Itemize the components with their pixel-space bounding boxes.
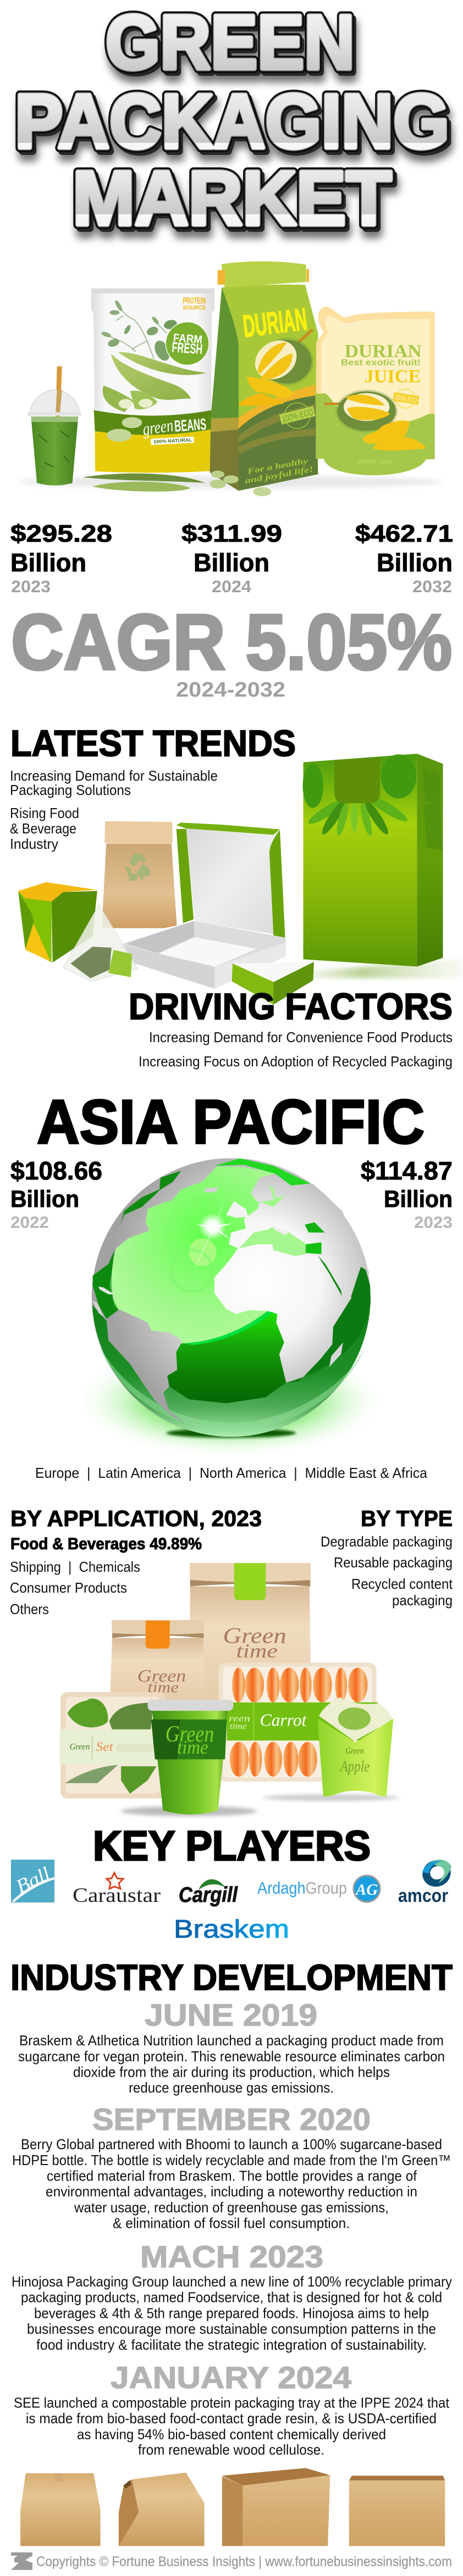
icon: green beans pouch: FRESH xyxy=(171,339,203,358)
icon: South America land xyxy=(107,1310,185,1423)
icon: green globe xyxy=(73,1158,387,1458)
development: June 2019: reduce greenhouse gas emissions. xyxy=(129,2079,334,2096)
icon: kraft recycle bag xyxy=(102,821,177,928)
logo: amcor xyxy=(398,1855,455,1906)
icon: yellow and green takeout box xyxy=(18,882,97,962)
icon: south atlantic deep ocean xyxy=(167,1311,286,1403)
stat: 2024 market size: $311.99 xyxy=(181,520,282,547)
text: application segments: Consumer Products xyxy=(10,1579,127,1596)
icon: Fortune Business Insights logo xyxy=(11,2552,32,2570)
text: type segments: packaging xyxy=(392,1592,453,1609)
title: GREEN xyxy=(106,0,355,85)
icon: small paper bag: time xyxy=(148,1679,179,1696)
title: GREEN xyxy=(108,2,357,88)
icon: apple box: Green xyxy=(345,1746,364,1756)
title: GREEN xyxy=(106,0,355,85)
title: MARKET xyxy=(73,155,392,241)
icon: green beans pouch: PROTEIN xyxy=(183,297,206,306)
development: March 2023 xyxy=(12,2239,452,2353)
development: September 2020 xyxy=(12,2102,451,2232)
icon: durian paper bag: For a healthy xyxy=(246,457,309,476)
logo: Ball: Ball xyxy=(12,1862,54,1898)
icon: central america sea xyxy=(93,1250,119,1319)
illustration: green boxes and kraft bag xyxy=(18,754,463,1004)
icon: durian juice pouch: 100% ECO xyxy=(394,393,418,404)
title xyxy=(15,0,453,250)
stat: 2032 market size xyxy=(355,520,453,596)
icon: apple box: Apple xyxy=(339,1758,370,1775)
icon: carrot tray: reen xyxy=(229,1713,250,1723)
icon: top rim and Canadian sea xyxy=(214,1159,311,1186)
icon: green iced drink cup xyxy=(27,366,81,486)
icon: green beans pouch: BEANS xyxy=(174,415,207,436)
text: type segments: Degradable packaging xyxy=(321,1533,453,1550)
icon: green beans pouch: FARM xyxy=(173,332,203,346)
stat: asia pacific 2022: $108.66 xyxy=(10,1156,102,1185)
logo: amcor: amcor xyxy=(398,1885,448,1906)
illustration: food packaging set xyxy=(59,1563,399,1816)
stat: 2024 market size: 2024 xyxy=(212,577,252,596)
icon: islands xyxy=(205,1187,219,1192)
text: application segments: Food & Beverages 49.89% xyxy=(10,1535,202,1553)
stat: 2023 market size: $295.28 xyxy=(10,520,112,547)
icon: loose green bean pods xyxy=(82,474,205,492)
title: GREEN xyxy=(109,8,358,94)
stat: asia pacific 2023: 2023 xyxy=(414,1214,453,1232)
heading: asia pacific: ASIA PACIFIC xyxy=(37,1087,425,1156)
text: latest trends list: & Beverage xyxy=(10,820,76,837)
icon: atlantic light ocean xyxy=(112,1166,285,1343)
development: June 2019 xyxy=(18,1998,445,2096)
development: March 2023: MACH 2023 xyxy=(140,2239,323,2274)
stat: asia pacific 2023: Billion xyxy=(384,1186,453,1212)
title: GREEN xyxy=(106,0,355,85)
logo: Braskem: Braskem xyxy=(174,1915,289,1943)
development: March 2023: food industry & facilitate the strategic integration of sustainability. xyxy=(36,2336,427,2353)
icon: durian paper bag: and joyful life! xyxy=(244,465,314,486)
text: application segments: Others xyxy=(10,1601,49,1617)
stat: asia pacific 2022 xyxy=(10,1156,102,1232)
icon: sun flare xyxy=(171,1206,231,1292)
icon: herb tray: Green xyxy=(70,1743,90,1751)
icon: large paper bag: Green xyxy=(223,1624,286,1648)
development: September 2020: environmental advantages, including a noteworthy reduction in xyxy=(46,2183,417,2200)
icon: green cup: Green xyxy=(166,1722,214,1747)
heading: latest trends: LATEST TRENDS xyxy=(10,723,296,764)
icon: tea bag pyramid xyxy=(63,905,138,981)
development: June 2019: sugarcane for vegan protein. This renewable resource eliminates carbon xyxy=(18,2048,445,2065)
text: latest trends list: Packaging Solutions xyxy=(10,782,131,798)
development: September 2020: Berry Global partnered with Bhoomi to launch a 100% sugarcane-based xyxy=(21,2136,442,2152)
icon: green cup xyxy=(147,1700,233,1815)
development: June 2019: JUNE 2019 xyxy=(145,1998,317,2032)
icon: herb tray: Set xyxy=(96,1740,114,1754)
icon: small paper bag xyxy=(110,1620,205,1702)
icon: green beans pouch: 100% NATURAL xyxy=(153,437,192,444)
illustration: kraft paper bags xyxy=(20,2468,445,2546)
icon: small paper bag: Green xyxy=(137,1667,186,1686)
icon: durian juice pouch: Best exotic fruit! xyxy=(341,358,421,368)
text: latest trends list: Industry xyxy=(10,836,58,852)
title: MARKET xyxy=(73,155,392,241)
icon: apple box xyxy=(317,1698,393,1796)
icon: kraft bag 1 xyxy=(20,2473,101,2546)
title: MARKET xyxy=(76,164,395,250)
logo: Ardagh Group xyxy=(257,1876,380,1902)
icon: kraft bag 4 xyxy=(349,2475,445,2546)
icon: green beans pouch xyxy=(91,288,214,473)
icon: durian juice pouch: JUICE xyxy=(365,366,421,387)
text: latest trends list: Increasing Demand for Sustainable xyxy=(10,767,218,784)
heading: by type: BY TYPE xyxy=(361,1506,453,1531)
icon: open pizza box xyxy=(120,822,286,989)
icon: large paper bag xyxy=(189,1563,311,1702)
text: type segments: Recycled content xyxy=(351,1576,453,1592)
stat: 2023 market size xyxy=(10,520,112,596)
icon: small green box xyxy=(232,962,314,1004)
icon: large paper bag: time xyxy=(236,1640,278,1662)
heading: key players: KEY PLAYERS xyxy=(93,1823,371,1870)
title: MARKET xyxy=(75,158,394,244)
icon: durian paper bag: DURIAN xyxy=(241,302,309,344)
icon: Mediterranean and Europe seas xyxy=(239,1227,307,1256)
icon: carrot tray: time xyxy=(230,1722,247,1731)
text: latest trends list: Rising Food xyxy=(10,805,79,821)
icon: Africa and Arabia land xyxy=(214,1183,370,1383)
development: June 2019: Braskem & Atlhetica Nutrition launched a packaging product made from xyxy=(19,2032,444,2049)
development: September 2020: certified material from Braskem. The bottle provides a range of xyxy=(47,2168,417,2184)
development: January 2024: from renewable wood cellulose. xyxy=(138,2441,324,2458)
heading: driving factors: DRIVING FACTORS xyxy=(129,986,453,1027)
development: September 2020: water usage, reduction of greenhouse gas emissions, xyxy=(74,2199,389,2216)
text: application segments: Shipping | Chemicals xyxy=(10,1559,140,1575)
stat: asia pacific 2023: $114.87 xyxy=(361,1156,453,1185)
icon: carrot tray xyxy=(218,1662,378,1782)
stat: 2023 market size: 2023 xyxy=(11,577,51,596)
development: March 2023: packaging products, named Foodservice, that is designed for hot & cold xyxy=(21,2289,442,2305)
icon: carrot tray: Carrot xyxy=(260,1711,307,1730)
development: March 2023: beverages & 4th & 5th range prepared foods. Hinojosa aims to help xyxy=(34,2305,429,2322)
stat: 2032 market size: 2032 xyxy=(412,577,452,596)
icon: kraft bag 3 xyxy=(222,2468,330,2546)
icon: kraft bag 2 xyxy=(119,2473,205,2546)
text: type segments: Reusable packaging xyxy=(334,1554,453,1571)
stat: 2032 market size: $462.71 xyxy=(355,520,453,547)
stat: 2024 market size xyxy=(181,520,282,596)
icon: durian juice pouch: WEIGHT 250ml xyxy=(358,459,392,464)
icon: green beans pouch: green xyxy=(141,415,174,439)
text: type segments xyxy=(321,1533,453,1609)
stat: asia pacific 2022: Billion xyxy=(10,1186,79,1212)
title: MARKET xyxy=(73,155,392,241)
development: June 2019: dioxide from the air during its production, which helps xyxy=(73,2063,390,2080)
text: application segments xyxy=(10,1535,202,1617)
stat: 2032 market size: Billion xyxy=(377,548,453,577)
development: January 2024: as having 54% bio-based content chemically derived xyxy=(77,2426,386,2443)
icon: indian ocean xyxy=(286,1267,371,1383)
text: driving factors list xyxy=(139,1029,453,1070)
development: January 2024: JANUARY 2024 xyxy=(111,2360,351,2395)
icon: durian paper bag xyxy=(210,262,318,496)
logo: Caraustar xyxy=(73,1873,161,1907)
heading: by application: BY APPLICATION, 2023 xyxy=(10,1506,262,1531)
stat: CAGR: 2024-2032 xyxy=(176,678,285,702)
illustration: green food packages xyxy=(18,262,443,496)
icon: tall green carton xyxy=(295,754,463,978)
stat: 2024 market size: Billion xyxy=(194,548,269,577)
logo: Cargill: Cargill xyxy=(179,1883,238,1907)
stat: asia pacific 2022: 2022 xyxy=(10,1214,49,1232)
icon: green cup: time xyxy=(177,1737,208,1758)
development: March 2023: businesses encourage more sustainable consumption patterns in the xyxy=(27,2321,436,2337)
stat: 2023 market size: Billion xyxy=(10,548,86,577)
development: January 2024 xyxy=(14,2360,450,2458)
text: other regions: Europe | Latin America | North America | Middle East & Africa xyxy=(35,1465,428,1481)
icon: durian juice pouch xyxy=(316,307,435,475)
development: September 2020: SEPTEMBER 2020 xyxy=(92,2102,371,2137)
icon: durian juice pouch: DURIAN xyxy=(345,341,422,361)
stat: asia pacific 2023 xyxy=(361,1156,453,1232)
icon: herb tray xyxy=(59,1692,166,1799)
development: January 2024: is made from bio-based food-contact grade resin, & is USDA-certified xyxy=(26,2410,437,2427)
logo: Ardagh Group: ArdaghGroup xyxy=(257,1878,347,1898)
development: September 2020: & elimination of fossil fuel consumption. xyxy=(113,2215,350,2232)
icon: green beans pouch: SOURCE xyxy=(183,304,206,311)
logo: Ardagh Group: AG xyxy=(355,1882,378,1899)
logo: Caraustar: Caraustar xyxy=(73,1884,161,1907)
text: latest trends list xyxy=(10,767,218,852)
icon: durian paper bag: 100% ECO xyxy=(281,408,315,425)
